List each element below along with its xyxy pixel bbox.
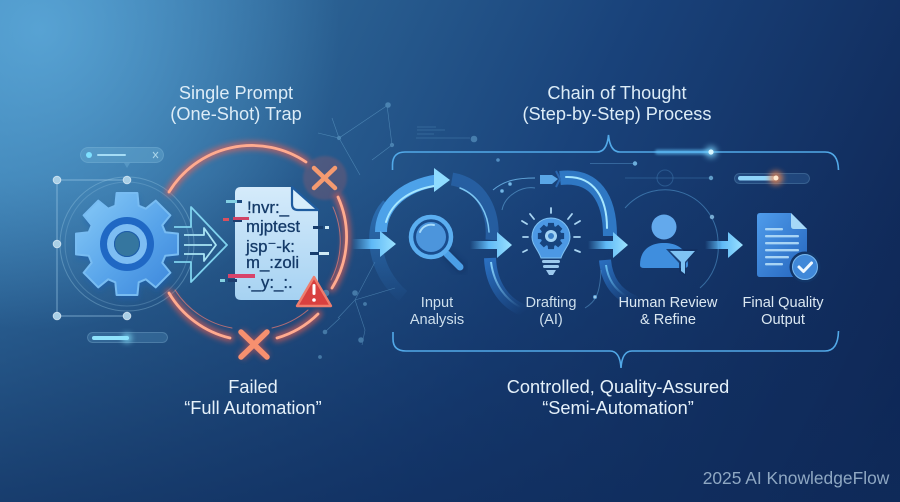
ribbon: lower curve two [605,260,636,302]
label: controlled semi-automation: “Semi-Automation” [542,398,694,418]
label: final quality output [742,295,824,328]
bottom bracket [393,331,838,368]
icon: red x top right [303,156,347,200]
network decoration [318,102,477,359]
garbled text: ._y:_:. [247,273,293,292]
icon: arrow to final output [705,232,743,258]
garbled text: !nvr:_ [247,198,290,217]
garbled text: mjptest [246,217,300,236]
label: input analysis [410,295,464,328]
glowing node on top bracket [655,146,717,158]
ribbon loops [376,177,636,312]
icon: person with funnel [640,214,698,276]
icon: lightbulb with gear [522,208,580,275]
ribbon: arch two [560,177,610,236]
label: human review: Human Review [619,295,718,311]
icon: arrow to human review [588,232,628,258]
heading: chain of thought: Chain of Thought [547,83,687,103]
label: drafting: Drafting [525,295,577,311]
garbled document [220,187,331,306]
label: human review [619,295,718,328]
icon: warning triangle [297,277,331,306]
human review halo [625,170,718,288]
heading: chain of thought: (Step-by-Step) Process [522,104,712,124]
heading: single prompt trap: Single Prompt [179,83,293,103]
left progress bar [88,332,168,343]
small tag on second arch [540,171,560,187]
icon: red x bottom [241,332,267,357]
icon: arrow into input analysis [352,231,396,257]
heading: single prompt trap: (One-Shot) Trap [170,104,302,124]
red failure ring [169,145,347,338]
heading: single prompt trap [170,83,302,124]
label: final quality output: Output [761,312,805,328]
top bracket [392,135,838,170]
ribbon: arch one [376,179,492,296]
garbled text: jsp⁻-k: [245,237,295,256]
label: controlled semi-automation [507,377,729,418]
garbled text: m_:zoli [246,253,299,272]
label: drafting: (AI) [539,312,563,328]
label: controlled semi-automation: Controlled, Quality-Assured [507,377,729,397]
right progress bar [734,171,810,185]
label: failed full automation: “Full Automation” [184,398,322,418]
label: final quality output: Final Quality [742,295,824,311]
label: input analysis: Input [421,295,453,311]
icon: gear [76,193,179,299]
heading: chain of thought [522,83,712,124]
label: drafting [525,295,577,328]
icon: final document with check [757,213,820,282]
label: input analysis: Analysis [410,312,464,328]
arrowhead on first arch [434,168,450,192]
icon: double arrow into document [174,207,227,282]
label: failed full automation: Failed [228,377,278,397]
gear frame with nodes [53,176,194,320]
garbled text [245,198,300,292]
spark lines around second arch [493,158,637,308]
left status pill [80,148,164,168]
label: human review: & Refine [640,312,696,328]
glitch marks [220,200,329,282]
footer credit: 2025 AI KnowledgeFlow [703,468,890,488]
icon: magnifier [411,217,461,268]
icon: arrow to drafting [470,232,512,258]
ribbon: lower curve one [490,258,528,312]
label: failed full automation [184,377,322,418]
